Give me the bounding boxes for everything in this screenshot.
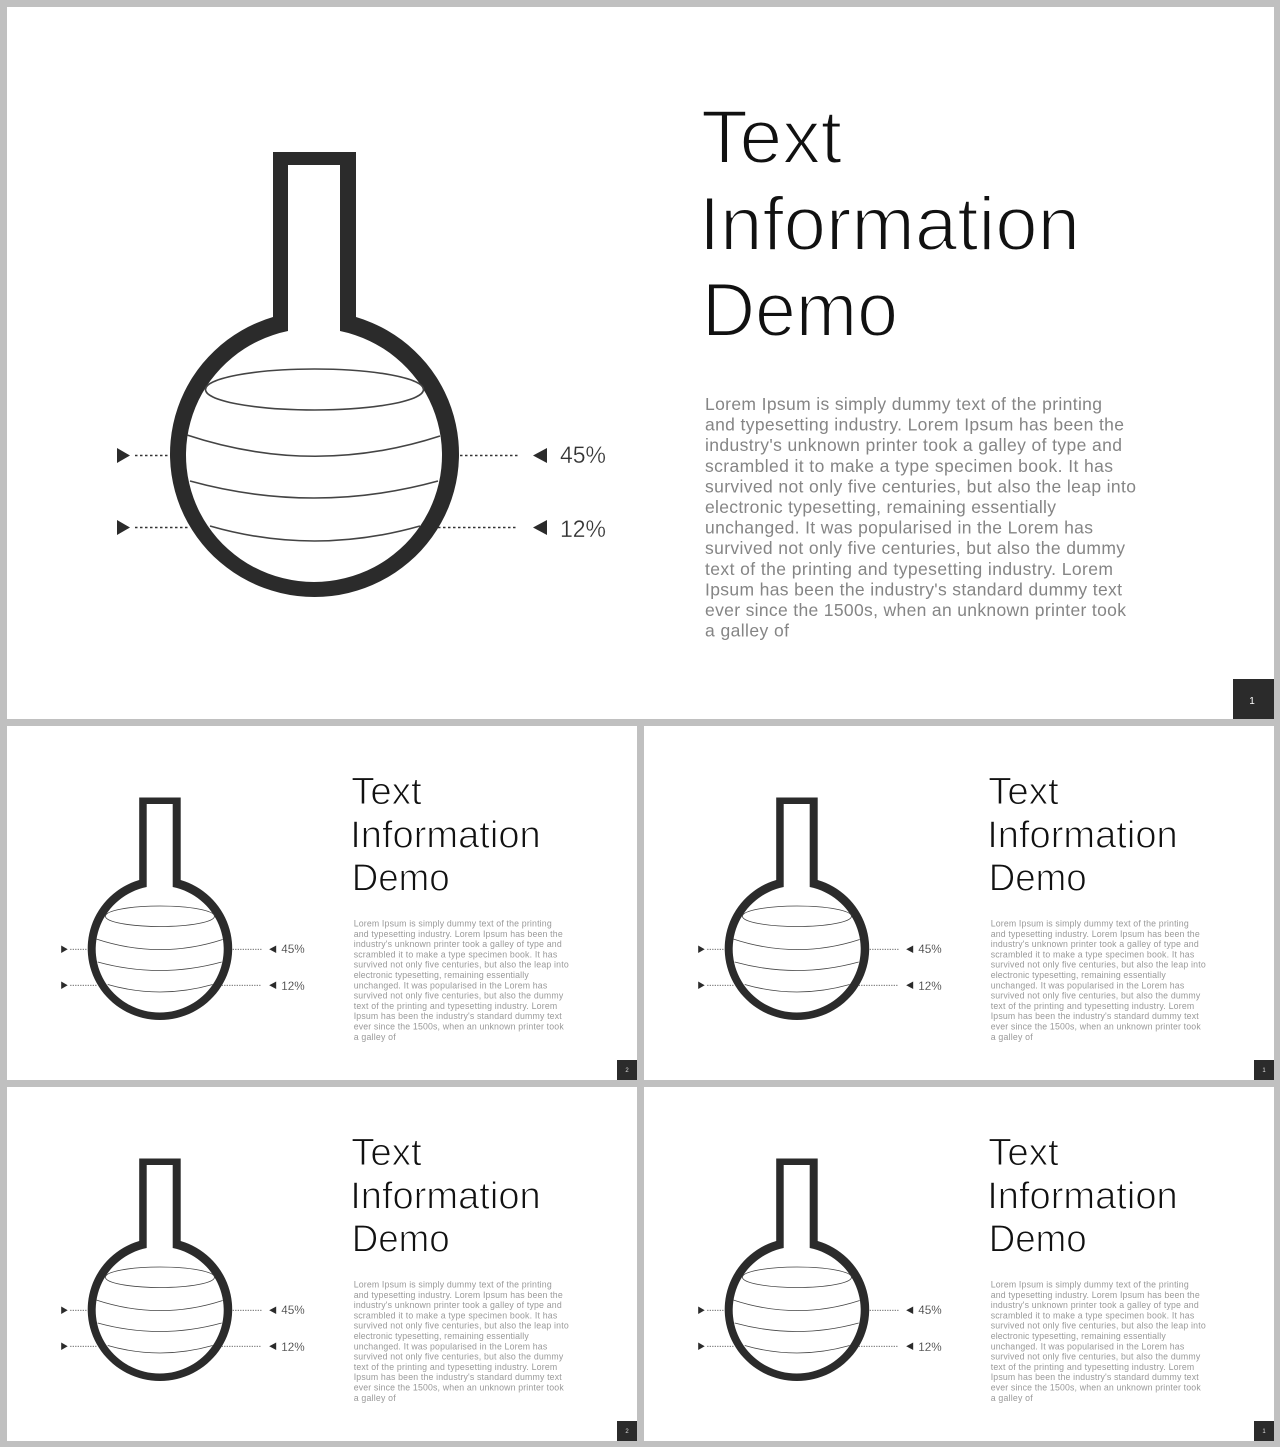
body text: industry's unknown printer took a galley of type and <box>705 435 1122 455</box>
title: Demo <box>352 1218 450 1260</box>
page number badge: 2 <box>625 1068 629 1074</box>
body text: unchanged. It was popularised in the Lorem has <box>354 980 548 990</box>
flask chart <box>698 1158 942 1381</box>
page number badge <box>1254 1060 1274 1080</box>
body text: electronic typesetting, remaining essentially <box>991 1331 1166 1341</box>
page number badge: 1 <box>1262 1429 1266 1435</box>
marker: 12%: 12% <box>560 516 606 543</box>
body text: unchanged. It was popularised in the Lorem has <box>705 518 1093 538</box>
body text: a galley of <box>354 1032 396 1042</box>
title: Demo <box>702 268 898 353</box>
body text: electronic typesetting, remaining essentially <box>354 970 529 980</box>
body text: survived not only five centuries, but also the dummy <box>991 1352 1201 1362</box>
panel: slide top right <box>644 726 1274 1080</box>
body text: electronic typesetting, remaining essentially <box>991 970 1166 980</box>
body text: electronic typesetting, remaining essentially <box>354 1331 529 1341</box>
body text <box>354 918 569 1042</box>
body text: scrambled it to make a type specimen book. It has <box>991 949 1195 959</box>
flask chart: 12% <box>281 1340 305 1354</box>
body text: text of the printing and typesetting industry. Lorem <box>705 559 1113 579</box>
body text: Lorem Ipsum is simply dummy text of the printing <box>705 394 1102 414</box>
body text: ever since the 1500s, when an unknown printer took <box>705 600 1126 620</box>
title: Demo <box>989 1218 1087 1260</box>
body text: survived not only five centuries, but also the leap into <box>354 960 569 970</box>
flask chart: 45% <box>281 1303 305 1317</box>
body text: text of the printing and typesetting industry. Lorem <box>354 1362 557 1372</box>
body text <box>705 394 1136 641</box>
body text: survived not only five centuries, but also the dummy <box>991 991 1201 1001</box>
title: Text <box>351 771 422 813</box>
body text: Ipsum has been the industry's standard dummy text <box>354 1011 562 1021</box>
body text: Ipsum has been the industry's standard dummy text <box>705 579 1122 599</box>
layer line 3 <box>210 526 420 541</box>
page number badge <box>1233 679 1274 719</box>
flask chart: 45% <box>918 942 942 956</box>
body text: a galley of <box>705 621 789 641</box>
body text: survived not only five centuries, but also the leap into <box>705 476 1136 496</box>
title: Information <box>987 814 1178 856</box>
page number badge <box>617 1421 637 1441</box>
body text: Lorem Ipsum is simply dummy text of the printing <box>354 918 552 928</box>
body text: and typesetting industry. Lorem Ipsum has been the <box>354 1290 563 1300</box>
body text: a galley of <box>991 1032 1033 1042</box>
body text: Ipsum has been the industry's standard dummy text <box>354 1372 562 1382</box>
body text: scrambled it to make a type specimen book. It has <box>705 456 1113 476</box>
title: Demo <box>352 857 450 899</box>
body text: scrambled it to make a type specimen book. It has <box>354 949 558 959</box>
body text: and typesetting industry. Lorem Ipsum has been the <box>991 1290 1200 1300</box>
slide content <box>698 771 1206 1042</box>
body text: scrambled it to make a type specimen book. It has <box>354 1310 558 1320</box>
title <box>350 771 541 899</box>
title: Text <box>701 95 842 180</box>
title <box>699 95 1080 353</box>
body text: survived not only five centuries, but also the dummy <box>354 1352 564 1362</box>
body text: survived not only five centuries, but also the dummy <box>705 538 1125 558</box>
body text: industry's unknown printer took a galley of type and <box>991 939 1199 949</box>
body text: electronic typesetting, remaining essentially <box>705 497 1056 517</box>
body text: Ipsum has been the industry's standard dummy text <box>991 1011 1199 1021</box>
title: Demo <box>989 857 1087 899</box>
title <box>987 771 1178 899</box>
marker: 45% <box>117 442 606 469</box>
body text: industry's unknown printer took a galley of type and <box>354 1300 562 1310</box>
body text: a galley of <box>991 1393 1033 1403</box>
body text: survived not only five centuries, but also the leap into <box>354 1321 569 1331</box>
slide content <box>698 1132 1206 1403</box>
title: Text <box>988 771 1059 813</box>
body text: Ipsum has been the industry's standard dummy text <box>991 1372 1199 1382</box>
title: Information <box>350 814 541 856</box>
body text: text of the printing and typesetting industry. Lorem <box>991 1362 1194 1372</box>
slide content <box>61 771 569 1042</box>
body text: unchanged. It was popularised in the Lorem has <box>991 980 1185 990</box>
body text <box>354 1280 569 1403</box>
page number badge <box>617 1060 637 1080</box>
layer line 2 <box>190 481 438 498</box>
body text: industry's unknown printer took a galley of type and <box>354 939 562 949</box>
body text <box>991 1280 1206 1403</box>
body text: ever since the 1500s, when an unknown printer took <box>354 1022 564 1032</box>
flask chart <box>61 798 305 1020</box>
body text: Lorem Ipsum is simply dummy text of the printing <box>991 918 1189 928</box>
flask chart: 12% <box>918 1340 942 1354</box>
flask chart: 45% <box>281 942 305 956</box>
title: Text <box>988 1132 1059 1174</box>
body text: Lorem Ipsum is simply dummy text of the printing <box>354 1280 552 1290</box>
title: Information <box>699 182 1080 267</box>
panel: slide bottom left <box>7 1087 637 1441</box>
flask chart <box>117 152 606 597</box>
title: Information <box>987 1175 1178 1217</box>
body text: ever since the 1500s, when an unknown printer took <box>354 1382 564 1392</box>
body text: a galley of <box>354 1393 396 1403</box>
panel: main slide <box>7 7 1274 719</box>
icon: flask outline <box>170 152 459 597</box>
body text: survived not only five centuries, but also the leap into <box>991 960 1206 970</box>
slide content <box>61 1132 569 1403</box>
body text: ever since the 1500s, when an unknown printer took <box>991 1022 1201 1032</box>
liquid surface ellipse <box>206 369 424 410</box>
body text: and typesetting industry. Lorem Ipsum has been the <box>991 929 1200 939</box>
body text: unchanged. It was popularised in the Lorem has <box>991 1341 1185 1351</box>
title <box>350 1132 541 1260</box>
page number badge <box>1254 1421 1274 1441</box>
body text: survived not only five centuries, but also the dummy <box>354 991 564 1001</box>
page number badge: 1 <box>1262 1068 1266 1074</box>
page number badge: 1 <box>1249 696 1255 707</box>
body text: text of the printing and typesetting industry. Lorem <box>991 1001 1194 1011</box>
flask chart <box>698 798 942 1020</box>
body text <box>991 918 1206 1042</box>
flask chart: 12% <box>281 979 305 993</box>
body text: text of the printing and typesetting industry. Lorem <box>354 1001 557 1011</box>
body text: survived not only five centuries, but also the leap into <box>991 1321 1206 1331</box>
title <box>987 1132 1178 1260</box>
body text: and typesetting industry. Lorem Ipsum has been the <box>354 929 563 939</box>
marker: 45%: 45% <box>560 442 606 469</box>
body text: Lorem Ipsum is simply dummy text of the printing <box>991 1280 1189 1290</box>
panel: slide bottom right <box>644 1087 1274 1441</box>
panel: slide top left <box>7 726 637 1080</box>
body text: scrambled it to make a type specimen book. It has <box>991 1310 1195 1320</box>
body text: and typesetting industry. Lorem Ipsum has been the <box>705 415 1124 435</box>
flask chart: 45% <box>918 1303 942 1317</box>
body text: industry's unknown printer took a galley of type and <box>991 1300 1199 1310</box>
flask chart: 12% <box>918 979 942 993</box>
title: Information <box>350 1175 541 1217</box>
title: Text <box>351 1132 422 1174</box>
body text: ever since the 1500s, when an unknown printer took <box>991 1382 1201 1392</box>
layer line 1 <box>187 435 440 456</box>
marker: 12% <box>117 516 606 543</box>
body text: unchanged. It was popularised in the Lorem has <box>354 1341 548 1351</box>
page number badge: 2 <box>625 1429 629 1435</box>
flask chart <box>61 1158 305 1381</box>
